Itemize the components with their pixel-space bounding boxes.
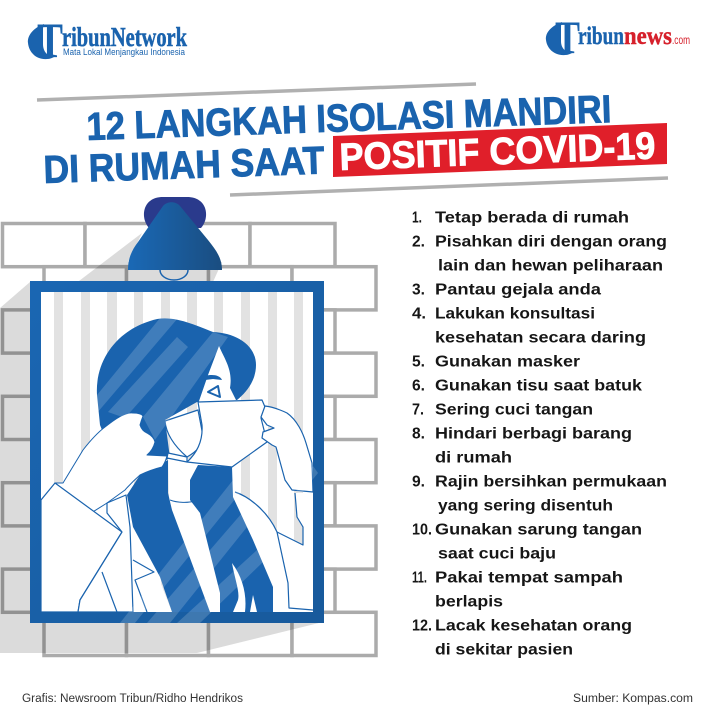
right hand <box>261 406 313 492</box>
logo: Tribun Network: ribunNetwork <box>62 22 187 52</box>
steps list: yang sering disentuh <box>438 498 613 514</box>
steps list: 3. <box>412 282 425 298</box>
steps list: Gunakan masker <box>435 354 580 370</box>
steps list: 6. <box>412 378 425 394</box>
cast shadow <box>0 233 323 653</box>
logo: Tribun Network <box>28 12 187 68</box>
steps list: 8. <box>412 426 425 442</box>
logo: Tribunnews.com: .com <box>672 33 690 47</box>
steps list: 7. <box>412 402 424 418</box>
steps list: Hindari berbagi barang <box>435 426 632 442</box>
brick wall <box>2 224 376 656</box>
steps list: 5. <box>412 354 425 370</box>
logo: Tribun Network: T <box>37 12 63 68</box>
logo: Tribunnews.com: ribun <box>578 23 624 50</box>
red highlight: Positif Covid-19: POSITIF COVID-19 <box>339 125 656 179</box>
footer credit: Grafis: Newsroom Tribun/Ridho Hendrikos <box>22 693 243 705</box>
footer source: Sumber: Kompas.com <box>573 693 693 705</box>
neck line <box>170 500 195 502</box>
title <box>37 84 668 195</box>
title: DI RUMAH SAAT <box>43 139 325 192</box>
steps list: 11. <box>412 570 427 586</box>
light streaks <box>97 318 318 623</box>
steps list: 1. <box>412 210 422 226</box>
steps list: di sekitar pasien <box>435 642 573 658</box>
steps list: saat cuci baju <box>438 546 556 562</box>
window bars <box>54 292 303 612</box>
steps list: 10. <box>412 522 432 538</box>
logo: Tribunnews.com: news <box>624 23 672 50</box>
window <box>41 292 313 612</box>
steps list: lain dan hewan peliharaan <box>438 258 663 274</box>
logo: Tribun Network: Mata Lokal Menjangkau Indonesia <box>63 47 185 57</box>
lamp <box>128 197 222 280</box>
steps list: 9. <box>412 474 425 490</box>
steps list: Pantau gejala anda <box>435 282 601 298</box>
steps list: Lakukan konsultasi <box>435 306 595 322</box>
logo: Tribunnews.com: T <box>555 12 580 64</box>
steps list: berlapis <box>435 594 503 610</box>
steps list: Gunakan tisu saat batuk <box>435 378 642 394</box>
figure: woman putting on a mask <box>41 318 313 612</box>
steps list: 4. <box>412 306 426 322</box>
steps list: Lacak kesehatan orang <box>435 618 632 634</box>
logo: Tribunnews.com <box>546 12 690 64</box>
steps list: Gunakan sarung tangan <box>435 522 642 538</box>
steps list: Rajin bersihkan permukaan <box>435 474 667 490</box>
steps list: kesehatan secara daring <box>435 330 646 346</box>
steps list: di rumah <box>435 450 512 466</box>
title: 12 LANGKAH ISOLASI MANDIRI <box>86 88 612 149</box>
window frame <box>36 286 318 618</box>
steps list: Tetap berada di rumah <box>435 210 629 226</box>
mask <box>165 400 267 467</box>
steps list: 12. <box>412 618 432 634</box>
steps list: Pisahkan diri dengan orang <box>435 234 667 250</box>
steps list: 2. <box>412 234 425 250</box>
steps list: Pakai tempat sampah <box>435 570 623 586</box>
steps list: Sering cuci tangan <box>435 402 593 418</box>
face <box>198 346 237 404</box>
hair <box>97 318 273 612</box>
left arm and coat <box>41 413 167 612</box>
steps list <box>412 210 667 658</box>
